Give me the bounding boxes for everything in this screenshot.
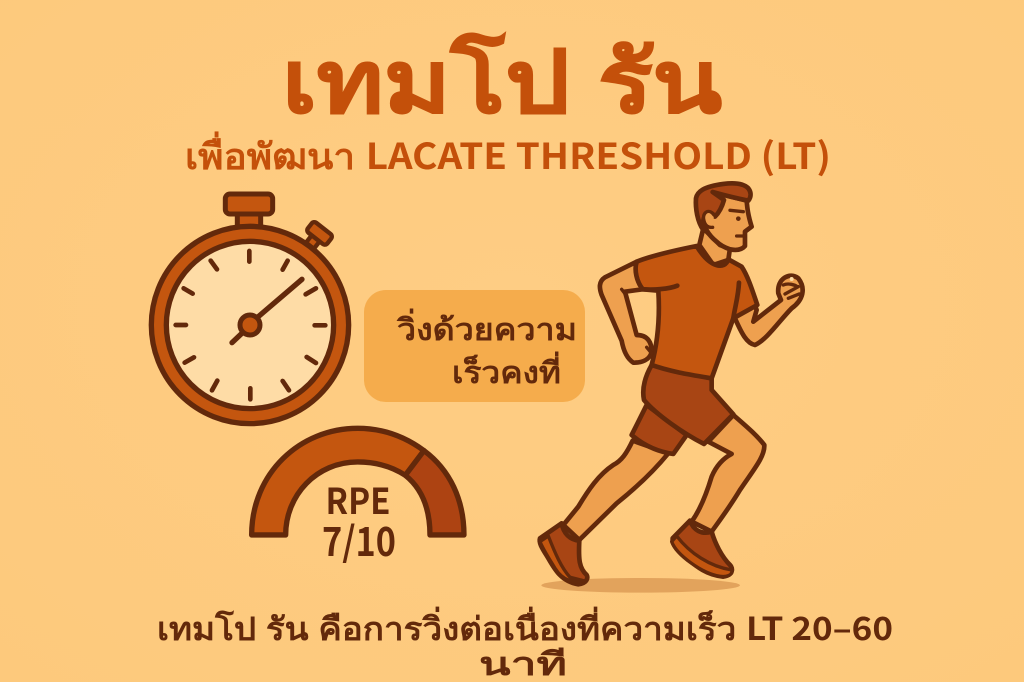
neck and head (699, 228, 730, 265)
callout: steady pace: เร็วคงที่ (452, 351, 561, 390)
ear (704, 211, 714, 227)
callout: steady pace: วิ่งด้วยความ (396, 308, 577, 347)
front leg (692, 415, 764, 532)
title: เทมโป รัน (282, 32, 722, 131)
callout: steady pace (364, 290, 585, 402)
illustration: runner (540, 183, 803, 593)
gauge: RPE 7/10: 7/10 (322, 510, 396, 568)
hair (696, 183, 751, 230)
near arm (600, 262, 652, 363)
shorts back (632, 405, 687, 454)
shorts front (643, 365, 733, 444)
gauge: RPE 7/10: RPE (326, 473, 390, 525)
face details (715, 210, 745, 250)
body text (157, 604, 893, 682)
hand detail (783, 284, 799, 298)
back leg (563, 441, 668, 540)
back shoe (540, 523, 587, 584)
t-shirt (635, 246, 757, 378)
body text: นาที (479, 646, 567, 682)
front shoe (673, 521, 732, 577)
far arm (735, 276, 803, 345)
ground shadow (541, 578, 740, 593)
gauge: RPE 7/10 (252, 428, 464, 568)
body text: เทมโป รัน คือการวิ่งต่อเนื่องที่ความเร็ว LT 20–60 (157, 604, 893, 650)
icon: stopwatch (151, 194, 349, 424)
subtitle: เพื่อพัฒนา LACATE THRESHOLD (LT) (185, 128, 831, 180)
